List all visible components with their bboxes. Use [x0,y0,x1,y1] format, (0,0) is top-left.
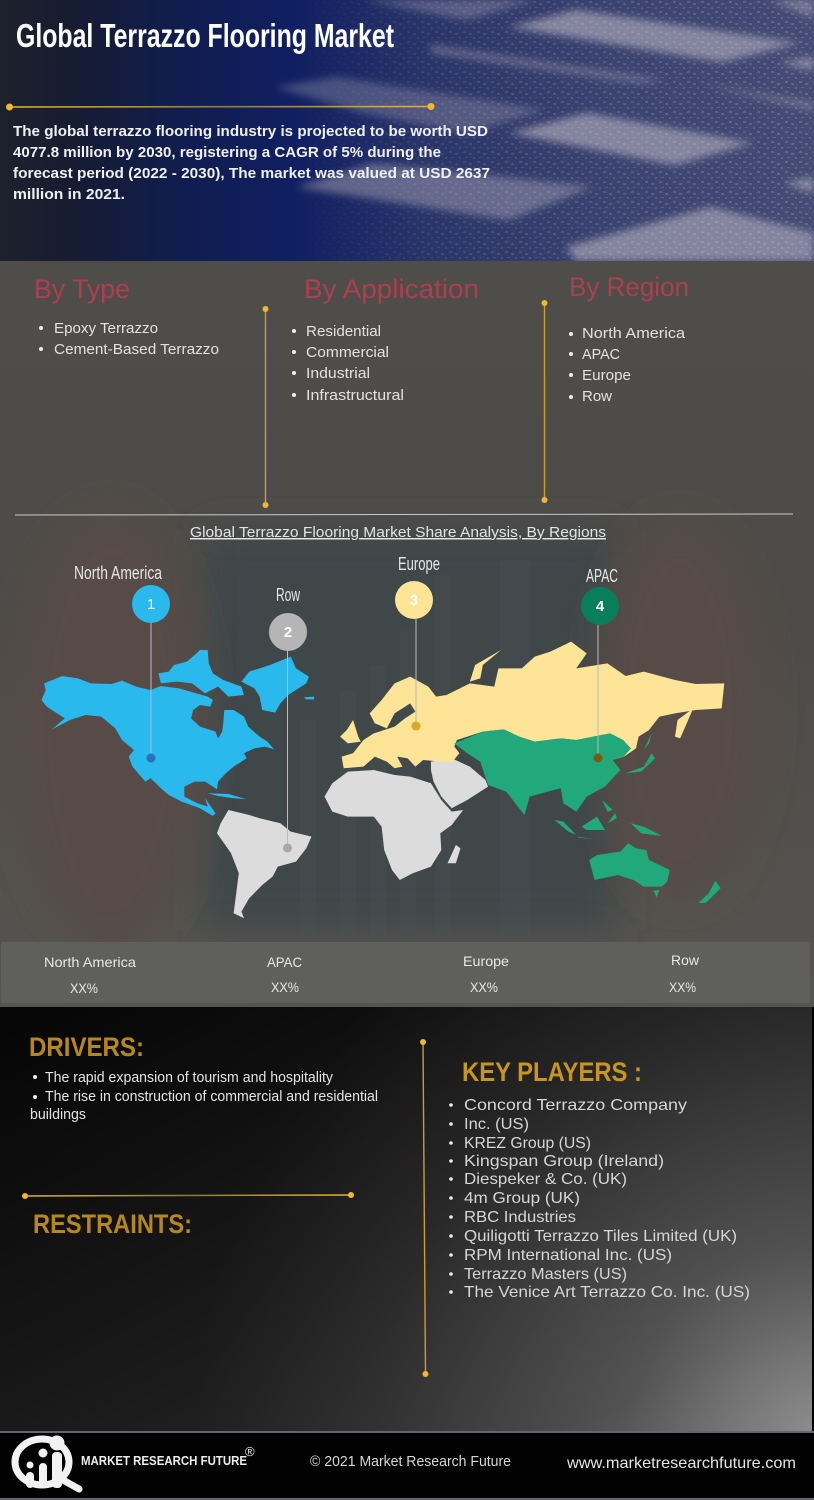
market share table [1,942,810,1003]
icon: market research future logo [15,1436,79,1489]
list: drivers [30,1070,378,1123]
marker 3: europe: 3 [410,592,418,609]
marker 2: row: 2 [284,624,292,641]
list: key players: RPM International Inc. (US) [464,1247,672,1264]
marker 1: north america [74,563,170,762]
market share table: XX% [470,979,498,995]
list: regions: Europe [582,367,631,384]
marker 1: north america: 1 [147,596,155,613]
map region: europe and russia [340,642,724,768]
list: regions: North America [582,325,686,342]
market share table: XX% [70,980,98,996]
divider: drivers and restraints [22,1192,354,1199]
list: key players: The Venice Art Terrazzo Co. Inc. (US) [464,1284,750,1301]
list: key players: Kingspan Group (Ireland) [464,1153,664,1170]
list: key players: Inc. (US) [464,1116,529,1133]
gold divider [6,103,434,110]
list: applications: Industrial [306,365,370,382]
list: key players: RBC Industries [464,1209,576,1226]
intro paragraph [13,123,490,203]
title: Global Terrazzo Flooring Market [16,17,394,54]
header panel [0,0,814,261]
heading: drivers: DRIVERS: [29,1032,144,1062]
list: applications: Residential [306,323,381,340]
divider: type and application [262,306,268,508]
divider: vertical [420,1039,428,1377]
marker 3: europe [395,554,440,730]
heading: key players: KEY PLAYERS : [462,1057,642,1087]
segmentation and map background [0,261,814,1007]
map region: asia pacific [454,729,721,903]
panel: by application [292,274,479,404]
market share table: Row [671,952,700,968]
map region: south america [217,810,312,918]
footer [0,1431,814,1500]
list: regions: Row [582,388,612,405]
list: regions [569,325,686,405]
market share table: XX% [271,979,299,995]
map region: north america [42,650,314,816]
divider: application and region [542,300,548,503]
marker 4: apac: 4 [596,598,605,615]
heading: restraints: RESTRAINTS: [33,1209,192,1239]
header background: terrazzo floor photo [0,0,814,261]
list: regions: APAC [582,346,620,363]
list: key players: Terrazzo Masters (US) [464,1266,627,1283]
list: drivers: buildings [30,1107,86,1123]
website: www.marketresearchfuture.com [566,1455,796,1472]
heading: by application: By Application [304,274,479,304]
marker 1: north america: North America [74,563,163,583]
intro paragraph: The global terrazzo flooring industry is projected to be worth USD [13,123,488,140]
market share table: APAC [267,954,302,970]
list: drivers: The rise in construction of commercial and residential [45,1089,378,1105]
market share table: North America [44,954,136,970]
registered mark: ® [245,1444,255,1459]
marker 4: apac: APAC [586,566,618,586]
list: key players: Diespeker & Co. (UK) [464,1171,627,1188]
list: key players: Quiligotti Terrazzo Tiles Limited (UK) [464,1228,737,1245]
list: applications [292,323,404,404]
marker 2: row: Row [276,585,301,605]
marker 4: apac [581,566,619,762]
list: key players: KREZ Group (US) [464,1135,591,1152]
list: drivers: The rapid expansion of tourism and hospitality [45,1070,334,1086]
list: key players: Concord Terrazzo Company [464,1097,687,1114]
panel: by type [34,274,219,358]
brand name: MARKET RESEARCH FUTURE [81,1454,247,1468]
list: types: Cement-Based Terrazzo [54,341,219,358]
chart title: Global Terrazzo Flooring Market Share Analysis, By Regions [190,524,606,541]
list: applications: Commercial [306,344,389,361]
marker 3: europe: Europe [398,554,440,574]
intro paragraph: 4077.8 million by 2030, registering a CAGR of 5% during the [13,144,441,161]
market share table: Europe [463,953,509,969]
panel: by region [569,272,689,405]
list: types: Epoxy Terrazzo [54,320,158,337]
list: key players: 4m Group (UK) [464,1190,580,1207]
copyright: © 2021 Market Research Future [310,1453,511,1470]
intro paragraph: million in 2021. [13,186,125,203]
list: types [39,320,219,358]
heading: by region: By Region [569,272,689,302]
list: key players [449,1097,750,1301]
list: applications: Infrastructural [306,387,404,404]
intro paragraph: forecast period (2022 - 2030), The market was valued at USD 2637 [13,165,490,182]
drivers and key players panel [0,1007,812,1431]
heading: by type: By Type [34,274,130,304]
world map [42,642,724,918]
map region: africa and middle east [324,758,488,880]
marker 2: row [269,585,307,852]
market share table: XX% [669,979,696,995]
